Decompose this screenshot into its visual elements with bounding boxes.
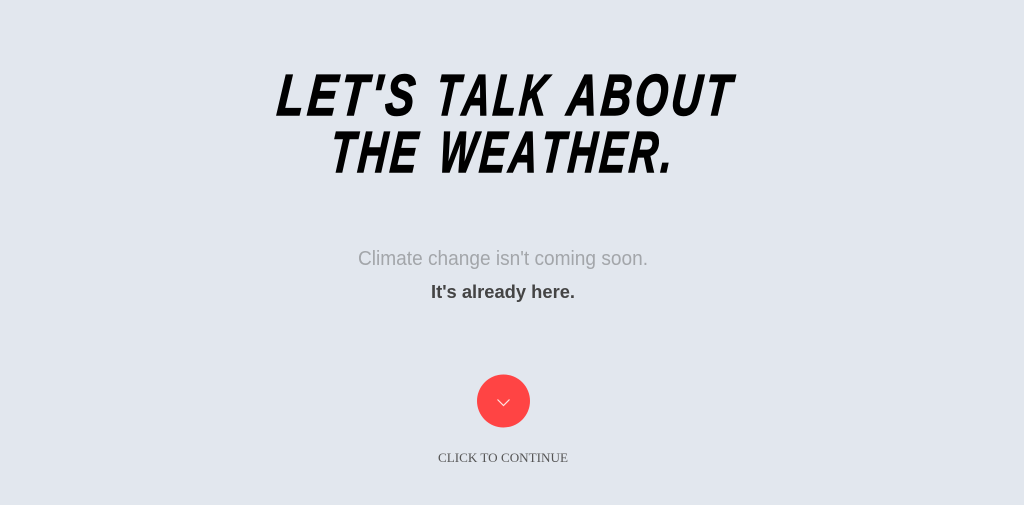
title: ABOUT bbox=[563, 63, 738, 128]
title: LET'S bbox=[275, 63, 422, 128]
title bbox=[275, 63, 738, 185]
title: WEATHER. bbox=[437, 120, 679, 185]
subtitle: Climate change isn't coming soon. bbox=[358, 248, 648, 270]
continue button with chevron icon bbox=[477, 374, 530, 428]
continue label: CLICK TO CONTINUE bbox=[438, 450, 568, 465]
title: TALK bbox=[434, 63, 554, 128]
subtitle bbox=[358, 248, 648, 302]
title: THE bbox=[328, 120, 424, 185]
subtitle: It's already here. bbox=[431, 281, 575, 302]
